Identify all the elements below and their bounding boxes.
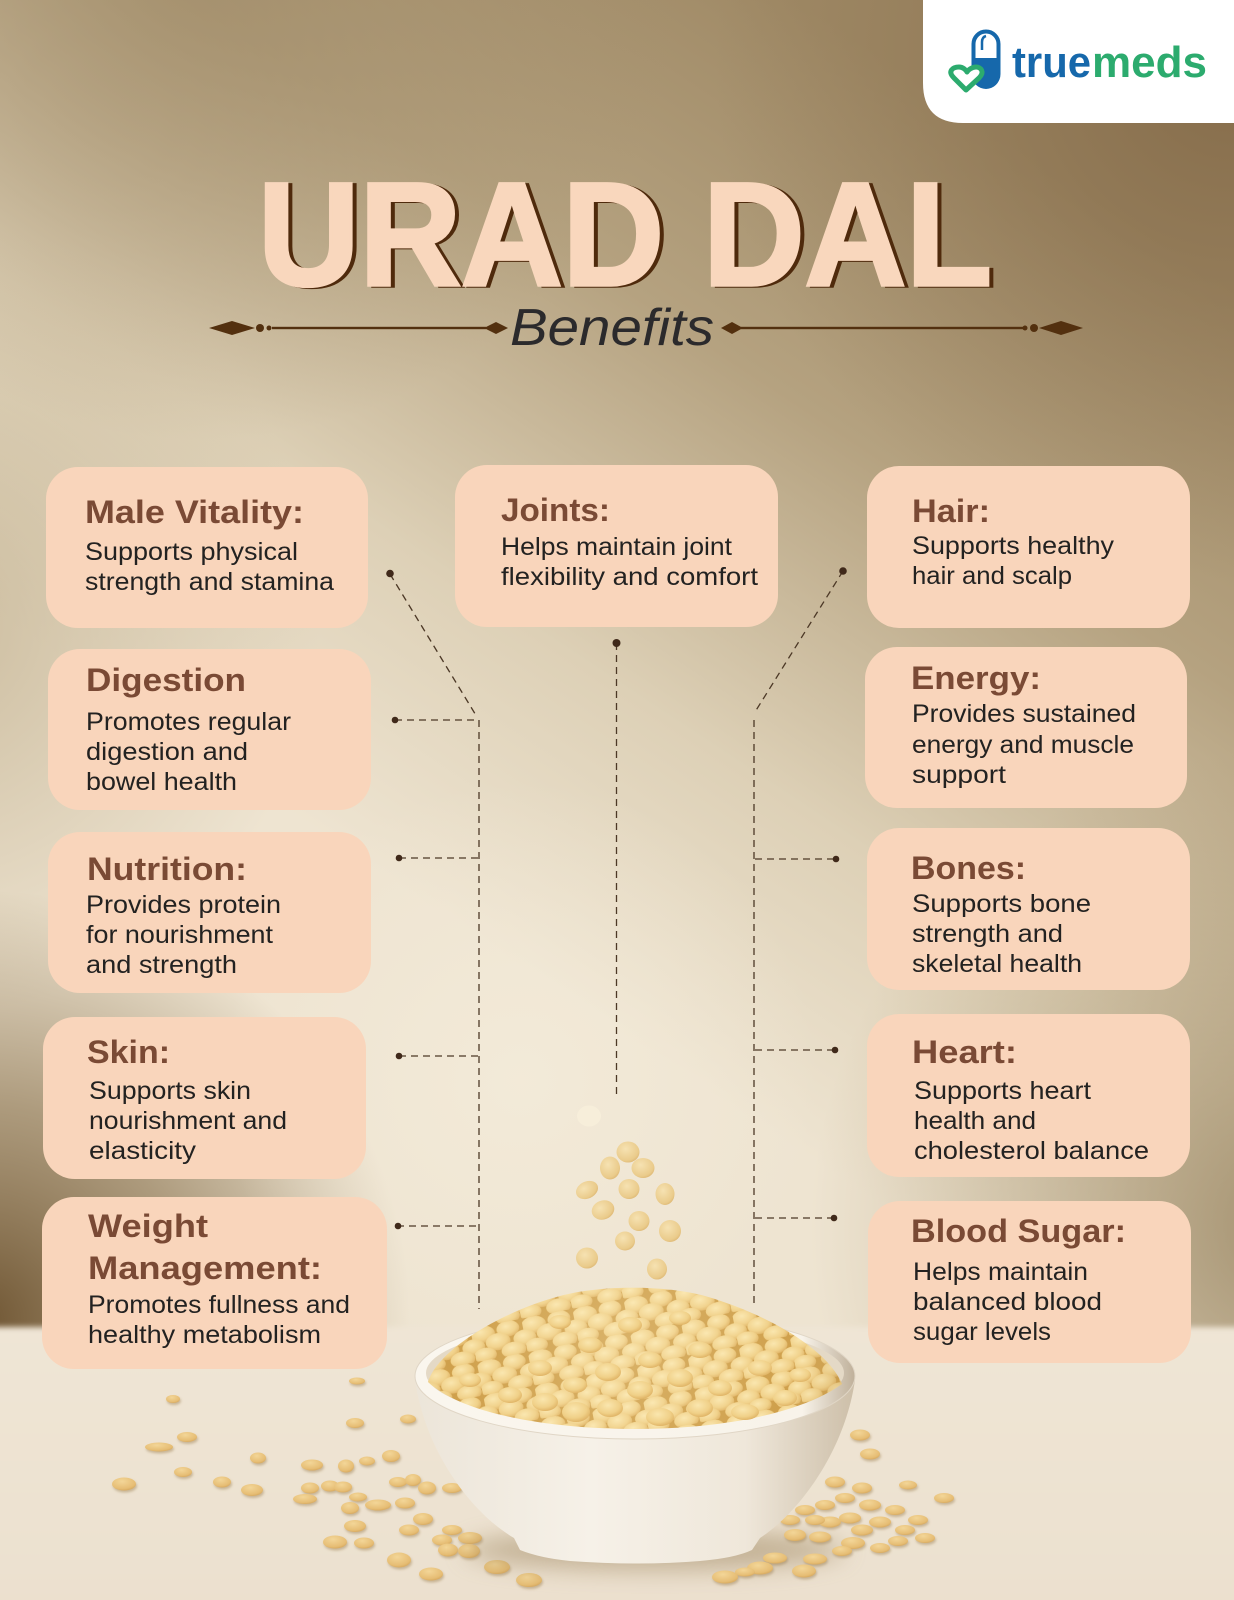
- bowl shadow: [465, 1530, 845, 1570]
- falling lentils: [573, 1106, 681, 1280]
- panel: bones: strength and: [912, 920, 1063, 948]
- panel: energy: [865, 647, 1187, 808]
- panel: blood sugar: Helps maintain: [913, 1258, 1088, 1286]
- panel: nutrition: Nutrition:: [87, 851, 247, 887]
- panel: male vitality: [46, 467, 368, 628]
- panel: joints: [455, 465, 778, 627]
- panel: nutrition: Provides protein: [86, 891, 281, 919]
- panel: hair: hair and scalp: [912, 562, 1072, 590]
- panel: heart: cholesterol balance: [914, 1137, 1149, 1165]
- bowl body: [415, 1380, 855, 1564]
- panel: nutrition: and strength: [86, 951, 237, 979]
- logo wordmark: [1012, 38, 1207, 87]
- panel: heart: health and: [914, 1107, 1036, 1135]
- heap shading: [428, 1288, 842, 1429]
- lentil heap: [428, 1288, 842, 1429]
- panel: digestion: digestion and: [86, 738, 248, 766]
- subtitle ornament: [209, 321, 1083, 335]
- panel: blood sugar: balanced blood: [913, 1288, 1102, 1316]
- scattered lentils right: [712, 1430, 954, 1584]
- logo wordmark: meds: [1092, 38, 1207, 87]
- panel: weight management: [42, 1197, 387, 1369]
- panel: skin: [43, 1017, 366, 1179]
- panel: joints: Joints:: [501, 492, 610, 528]
- panel: heart: Heart:: [912, 1034, 1017, 1070]
- foreground lentils: [459, 1311, 811, 1426]
- logo panel: [923, 0, 1234, 123]
- panel: blood sugar: Blood Sugar:: [911, 1213, 1126, 1249]
- panel: digestion: bowel health: [86, 768, 237, 796]
- icon: capsule with heart: [951, 32, 1000, 90]
- connector lines: [386, 567, 847, 1309]
- panel: weight management: healthy metabolism: [88, 1321, 321, 1349]
- panel: digestion: Promotes regular: [86, 708, 291, 736]
- title: URAD DAL: [262, 154, 996, 318]
- panel: bones: Bones:: [911, 850, 1026, 886]
- logo wordmark: true: [1012, 38, 1091, 87]
- panel: weight management: Weight: [88, 1208, 208, 1244]
- bowl rim: [415, 1313, 855, 1439]
- panel: hair: [867, 466, 1190, 628]
- panel: bones: [867, 828, 1190, 990]
- panel: blood sugar: [868, 1201, 1191, 1363]
- title: URAD DAL: [258, 153, 992, 317]
- panel: bones: Supports bone: [912, 890, 1091, 918]
- panel: energy: support: [912, 761, 1006, 789]
- panel: nutrition: for nourishment: [86, 921, 273, 949]
- panel: skin: nourishment and: [89, 1107, 287, 1135]
- panel: skin: elasticity: [89, 1137, 197, 1165]
- panel: skin: Supports skin: [89, 1077, 251, 1105]
- bowl of urad dal: [415, 1288, 855, 1564]
- panel: weight management: Management:: [88, 1250, 322, 1286]
- panel: blood sugar: sugar levels: [913, 1318, 1051, 1346]
- panel: skin: Skin:: [87, 1034, 170, 1070]
- bowl interior: [426, 1321, 844, 1425]
- panel: joints: flexibility and comfort: [501, 563, 758, 591]
- panel: hair: Supports healthy: [912, 532, 1115, 560]
- panel: energy: Energy:: [911, 660, 1041, 696]
- subtitle: Benefits: [510, 299, 714, 357]
- panel: weight management: Promotes fullness and: [88, 1291, 350, 1319]
- panel: energy: Provides sustained: [912, 700, 1136, 728]
- panel: male vitality: Supports physical: [85, 538, 298, 566]
- panel: bones: skeletal health: [912, 950, 1082, 978]
- panel: energy: energy and muscle: [912, 731, 1134, 759]
- panel: heart: [867, 1014, 1190, 1177]
- panel: male vitality: strength and stamina: [85, 568, 334, 596]
- panel: digestion: Digestion: [86, 662, 246, 698]
- panel: male vitality: Male Vitality:: [85, 494, 304, 530]
- panel: nutrition: [48, 832, 371, 993]
- table surface: [0, 1327, 1234, 1600]
- scattered lentils left: [112, 1378, 542, 1587]
- panel: digestion: [48, 649, 371, 810]
- panel: hair: Hair:: [912, 493, 990, 529]
- panel: heart: Supports heart: [914, 1077, 1091, 1105]
- panel: joints: Helps maintain joint: [501, 533, 732, 561]
